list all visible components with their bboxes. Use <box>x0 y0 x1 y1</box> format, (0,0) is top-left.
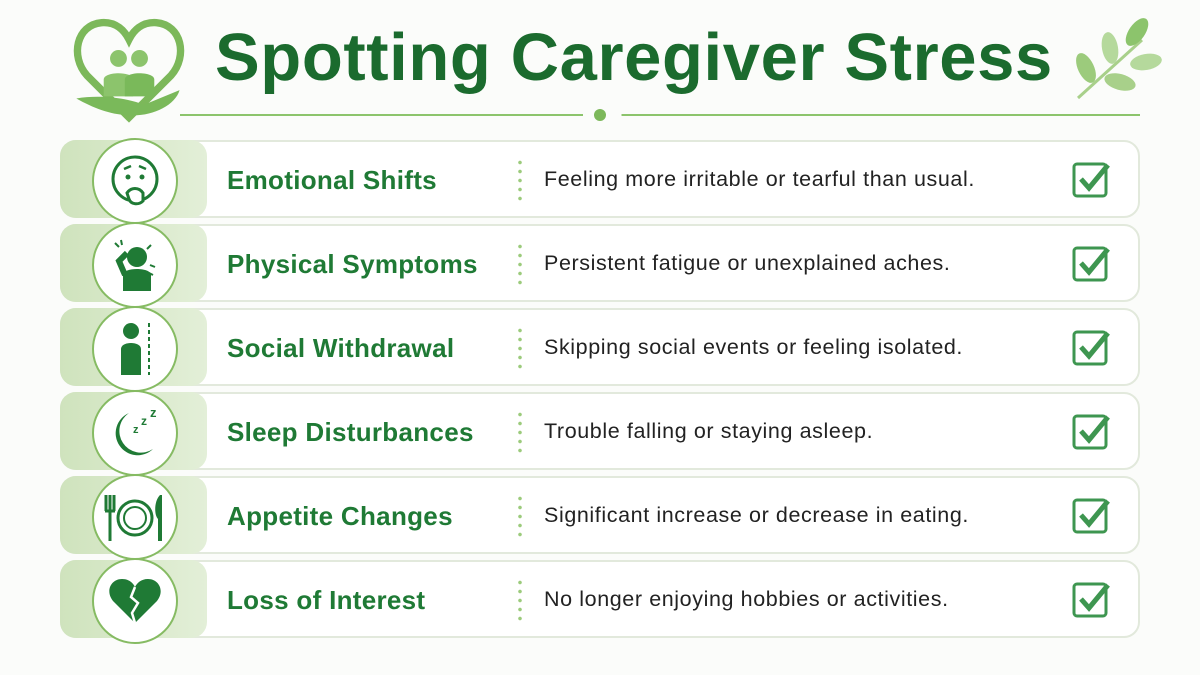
row: Social Withdrawal <box>60 308 1140 386</box>
icon: person with headache <box>92 222 178 308</box>
row: Physical Symptoms: Physical Symptoms <box>227 249 478 279</box>
logo: heart with caring hand <box>74 18 184 122</box>
row: Physical Symptoms: Persistent fatigue or unexplained aches. <box>544 251 950 275</box>
row: Sleep Disturbances: Trouble falling or staying asleep. <box>544 419 873 443</box>
row: Loss of Interest <box>60 560 1140 638</box>
row: Appetite Changes: Significant increase or decrease in eating. <box>544 503 969 527</box>
icon: moon with zzz: z <box>133 424 139 436</box>
row: Appetite Changes <box>60 476 1140 554</box>
row: Emotional Shifts: Feeling more irritable or tearful than usual. <box>544 167 975 191</box>
icon: leaf sprig <box>1076 18 1162 99</box>
row: Social Withdrawal: Social Withdrawal <box>227 333 454 363</box>
title: Spotting Caregiver Stress <box>215 20 1053 95</box>
icon: moon with zzz: z <box>150 405 157 420</box>
icon: person alone <box>92 306 178 392</box>
row: Loss of Interest: No longer enjoying hobbies or activities. <box>544 587 949 611</box>
row: Social Withdrawal: Skipping social events or feeling isolated. <box>544 335 963 359</box>
row: Appetite Changes: Appetite Changes <box>227 501 453 531</box>
icon: moon with zzz: z <box>141 414 147 428</box>
icon: plate with fork and knife <box>92 474 178 560</box>
row: Sleep Disturbances <box>60 392 1140 470</box>
row: Emotional Shifts <box>60 140 1140 218</box>
icon: worried face <box>92 138 178 224</box>
icon: moon with zzz <box>92 390 178 476</box>
row: Emotional Shifts: Emotional Shifts <box>227 165 437 195</box>
divider rule with dot <box>180 114 1140 116</box>
row: Sleep Disturbances: Sleep Disturbances <box>227 417 474 447</box>
row: Loss of Interest: Loss of Interest <box>227 585 425 615</box>
icon: broken heart <box>92 558 178 644</box>
row: Physical Symptoms <box>60 224 1140 302</box>
